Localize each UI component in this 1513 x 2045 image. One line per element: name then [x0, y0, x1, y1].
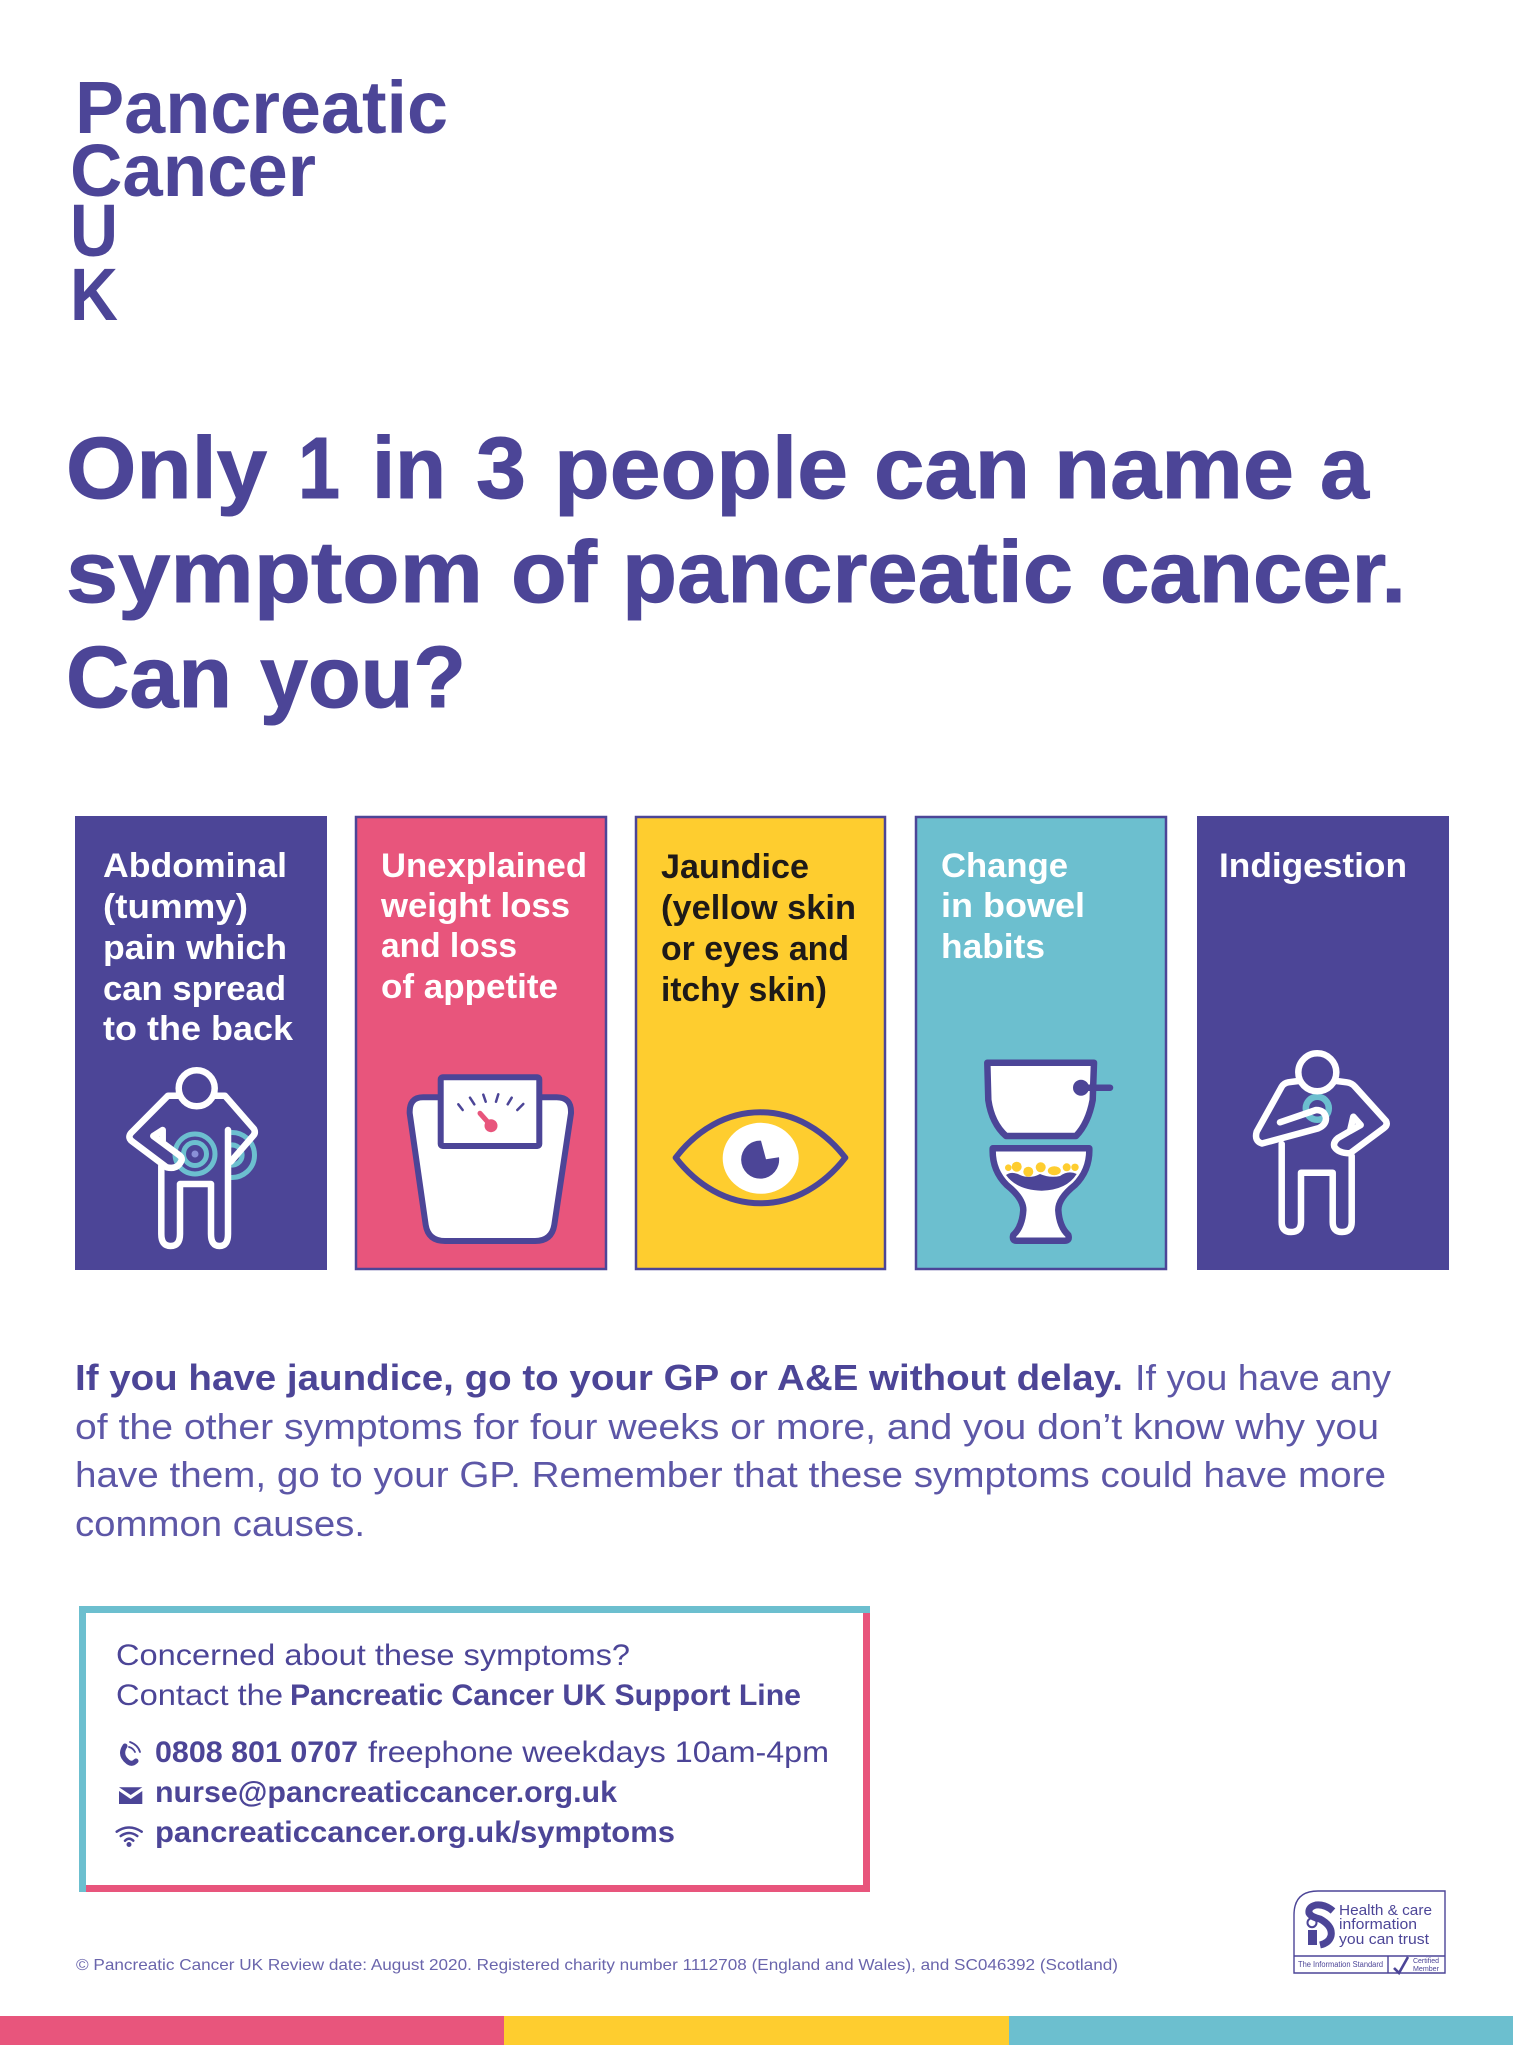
support line intro: [116, 1639, 801, 1712]
icon: eye: [676, 1112, 845, 1203]
panel text: abdominal pain: [103, 847, 293, 1048]
contact phone: [155, 1736, 829, 1769]
headline: pancreatic: [622, 524, 1073, 621]
panel: bowel habits: [916, 817, 1166, 1269]
headline: in: [372, 420, 446, 517]
panel text: jaundice: itchy skin): [661, 971, 827, 1009]
badge text: Certified: [1413, 1958, 1439, 1965]
headline: Only: [66, 420, 267, 517]
badge text: The Information Standard: [1298, 1960, 1383, 1969]
headline: 1: [298, 420, 340, 517]
headline: of: [511, 524, 598, 621]
headline: people: [554, 420, 848, 517]
panel text: bowel habits: habits: [941, 928, 1045, 966]
advice paragraph: of the other symptoms for four weeks or more, and you don’t know why you: [75, 1406, 1379, 1447]
advice paragraph: If you have any: [1135, 1357, 1391, 1398]
headline: cancer.: [1100, 524, 1406, 621]
panel text: weight loss: weight loss: [380, 887, 570, 925]
headline: you?: [260, 629, 466, 726]
panel text: indigestion: Indigestion: [1219, 847, 1407, 885]
panel text: weight loss: and loss: [381, 927, 517, 965]
logo: Pancreatic Cancer UK: Cancer: [70, 129, 316, 212]
contact email: nurse@pancreaticcancer.org.uk: [155, 1776, 617, 1809]
panel text: weight loss: of appetite: [381, 968, 558, 1006]
icon: person with abdominal pain: [129, 1070, 255, 1246]
headline: name: [1054, 420, 1294, 517]
icon: envelope: [119, 1787, 142, 1804]
support line intro: Concerned about these symptoms?: [116, 1639, 630, 1672]
panel text: abdominal pain: Abdominal: [103, 847, 287, 885]
panel text: jaundice: Jaundice: [661, 848, 809, 886]
advice paragraph: have them, go to your GP. Remember that these symptoms could have more: [75, 1454, 1386, 1495]
logo: Pancreatic Cancer UK: K: [70, 253, 118, 336]
logo: Pancreatic Cancer UK: U: [70, 189, 118, 272]
badge text: information: [1339, 1916, 1417, 1933]
headline: symptom: [66, 524, 483, 621]
panel: weight loss: [356, 817, 606, 1269]
panel text: weight loss: Unexplained: [381, 847, 587, 885]
badge check mark: [1394, 1957, 1408, 1973]
badge symbol: [1308, 1905, 1333, 1945]
contact phone: freephone weekdays 10am-4pm: [368, 1736, 829, 1769]
headline: 3: [476, 420, 526, 517]
badge text: Member: [1413, 1966, 1440, 1973]
panel text: abdominal pain: pain which: [103, 929, 287, 967]
box border: [79, 1606, 870, 1892]
bottom colour bar: [0, 2016, 1513, 2045]
contact phone: 0808 801 0707: [155, 1736, 358, 1769]
panel text: bowel habits: in bowel: [941, 887, 1085, 925]
panel text: weight loss: [380, 847, 587, 1006]
panel: indigestion: [1197, 816, 1449, 1270]
icon: wifi: [117, 1828, 142, 1847]
panel text: bowel habits: [941, 847, 1085, 966]
badge text: you can trust: [1339, 1931, 1430, 1948]
badge text: [1298, 1902, 1440, 1973]
contact box: [79, 1606, 870, 1892]
advice paragraph: [75, 1357, 1391, 1544]
support line intro: Pancreatic Cancer UK Support Line: [290, 1679, 801, 1712]
logo: Pancreatic Cancer UK: [70, 66, 448, 336]
badge text: Health & care: [1339, 1902, 1432, 1919]
headline: Can: [66, 629, 232, 726]
advice paragraph: common causes.: [75, 1503, 365, 1544]
headline: [66, 420, 1406, 726]
icon: person with indigestion: [1256, 1053, 1387, 1232]
logo: Pancreatic Cancer UK: Pancreatic: [75, 66, 448, 149]
icon: phone: [123, 1742, 140, 1763]
headline: a: [1320, 420, 1370, 517]
panel text: abdominal pain: can spread: [103, 970, 286, 1008]
panel: abdominal pain: [75, 816, 327, 1270]
footer copyright: © Pancreatic Cancer UK Review date: August 2020. Registered charity number 1112708 (England and Wales), and SC046392 (Scotland): [76, 1957, 1118, 1974]
panel text: abdominal pain: to the back: [103, 1010, 293, 1048]
panel: jaundice: [636, 817, 885, 1269]
contact website: pancreaticcancer.org.uk/symptoms: [155, 1816, 675, 1849]
panel text: jaundice: [661, 848, 856, 1009]
badge: Information Standard: [1294, 1891, 1445, 1973]
panel text: jaundice: (yellow skin: [661, 889, 856, 927]
icon: weighing scales: [410, 1077, 571, 1241]
support line intro: Contact the: [116, 1679, 283, 1712]
panel text: bowel habits: Change: [941, 847, 1068, 885]
advice paragraph: If you have jaundice, go to your GP or A&E without delay.: [75, 1357, 1123, 1398]
headline: can: [874, 420, 1030, 517]
panel text: jaundice: or eyes and: [661, 930, 849, 968]
icon: toilet: [987, 1063, 1110, 1241]
panel text: abdominal pain: (tummy): [103, 888, 248, 926]
